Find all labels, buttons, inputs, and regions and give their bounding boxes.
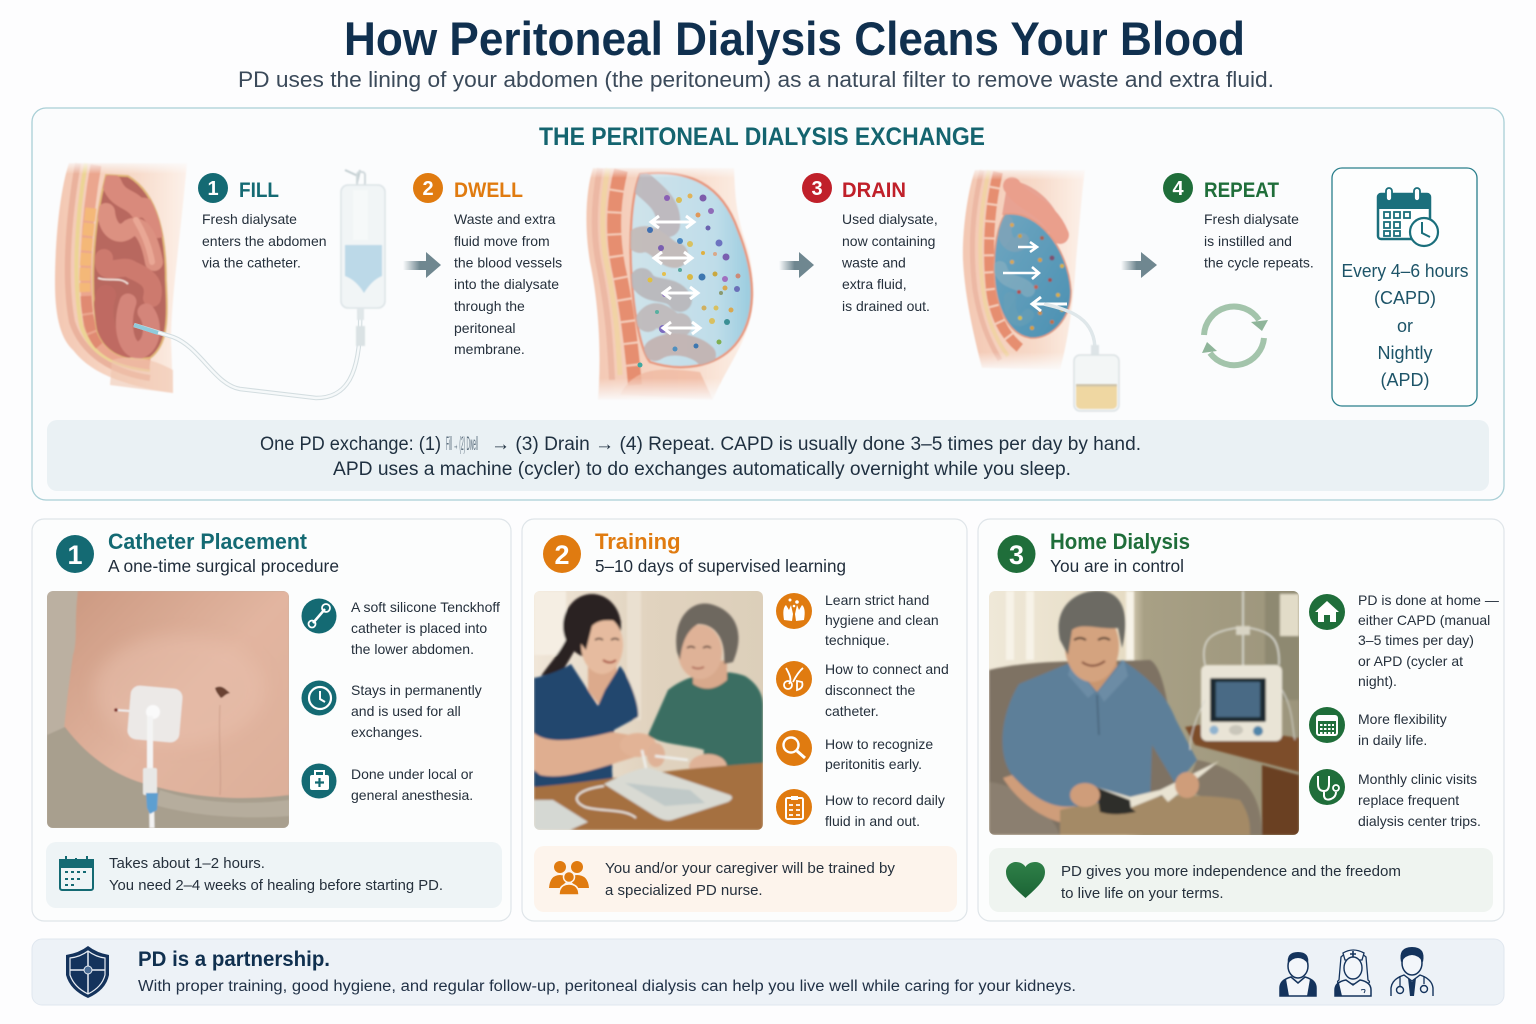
armchair (989, 660, 1180, 835)
bullet: soft silicone catheter: catheter is placed into (351, 620, 487, 636)
bullet: hand hygiene (776, 592, 939, 648)
bullet: recognize peritonitis: peritonitis early. (825, 756, 922, 772)
book (1096, 761, 1219, 808)
step 1: fill: via the catheter. (202, 254, 301, 270)
badge 2: 2 (554, 540, 570, 570)
callout: trained by nurse: a specialized PD nurse. (605, 882, 763, 899)
panel: catheter placement (32, 519, 511, 921)
step 3: drain (802, 173, 938, 314)
catheter tube (134, 310, 360, 398)
step 3: drain: extra fluid, (842, 276, 907, 292)
callout: exchange frequency: Every 4–6 hours (1342, 261, 1468, 281)
bullet: anesthesia: Done under local or (351, 766, 474, 782)
icon: nurse (1335, 950, 1371, 996)
arrow: fill to dwell (403, 252, 441, 278)
step 2: dwell: DWELL (454, 179, 523, 202)
bullet: connect and disconnect: How to connect and (825, 661, 949, 677)
step 4: repeat (1163, 173, 1314, 270)
panel: the peritoneal dialysis exchange (32, 108, 1504, 500)
callout: trained by nurse: You and/or your caregiver will be trained by (605, 860, 896, 877)
photo: abdomen with catheter dressing (47, 591, 289, 828)
callout: duration and healing: Takes about 1–2 hours. (109, 855, 265, 872)
exchange summary band: One PD exchange: (1) (260, 434, 441, 455)
drain tube (1044, 304, 1095, 352)
badge 3: 3 (1009, 540, 1024, 570)
bullet: clinic visits: Monthly clinic visits (1358, 771, 1477, 787)
bullet: hand hygiene: Learn strict hand (825, 592, 929, 608)
step 3: drain: DRAIN (842, 179, 906, 202)
footer banner: partnership: PD is a partnership. (138, 948, 330, 971)
step 4: repeat: REPEAT (1204, 179, 1279, 202)
step 1: fill: Fresh dialysate (202, 211, 297, 227)
step 2: dwell: the blood vessels (454, 254, 562, 270)
icon: patient (1280, 952, 1316, 996)
card heading (595, 529, 846, 576)
badge 1: 1 (67, 540, 83, 570)
step 2: dwell: Waste and extra (454, 211, 556, 227)
icon: heart (1006, 862, 1045, 898)
badge 1 (56, 535, 94, 573)
bullet: recognize peritonitis (776, 730, 933, 772)
exchange summary band (47, 420, 1489, 491)
bullet: connect and disconnect (776, 661, 949, 719)
callout: exchange frequency: or (1397, 316, 1413, 336)
bullet: flexibility: More flexibility (1358, 711, 1447, 727)
step 2: dwell: 2 (422, 178, 434, 200)
bullet: hand hygiene: technique. (825, 632, 890, 648)
step 3: drain: waste and (841, 254, 906, 270)
step 3: drain: 3 (811, 178, 823, 200)
bullet: done at home: PD is done at home — (1358, 592, 1499, 608)
badge 3 (998, 535, 1036, 573)
card heading: Home Dialysis (1050, 529, 1190, 554)
exchange summary band: APD uses a machine (cycler) to do exchanges automatically overnight while you sleep. (333, 459, 1071, 480)
bullet: connect and disconnect: catheter. (825, 703, 879, 719)
card heading: Training (595, 529, 681, 554)
illustration: abdomen during dwell (584, 164, 753, 402)
bullet: done at home: 3–5 times per day) (1358, 632, 1474, 648)
waste particles (638, 194, 740, 368)
callout: exchange frequency: (CAPD) (1374, 288, 1436, 308)
bullet: done at home: either CAPD (manual (1358, 612, 1490, 628)
bullet: clinic visits: dialysis center trips. (1358, 813, 1481, 829)
exchange summary band: → (3) Drain → (4) Repeat. CAPD is usually done 3–5 times per day by hand. (491, 434, 1141, 455)
step 2: dwell: into the dialysate (454, 276, 559, 292)
arrows: flow out (1003, 242, 1067, 311)
callout: independence: to live life on your terms. (1061, 885, 1224, 902)
step 1: fill (198, 173, 327, 270)
bullet: anesthesia: general anesthesia. (351, 787, 473, 803)
step 4: repeat: Fresh dialysate (1204, 211, 1299, 227)
step 4: repeat: the cycle repeats. (1204, 254, 1314, 270)
step 3: drain: now containing (842, 233, 935, 249)
bullet: clinic visits (1309, 769, 1481, 829)
cycler machine and table (1242, 591, 1244, 668)
nurse (563, 594, 621, 658)
bullet: record daily fluid (776, 789, 945, 829)
icon: shield (66, 946, 109, 998)
bullet: soft silicone catheter (302, 598, 500, 657)
step 2: dwell: through the (454, 298, 525, 314)
callout: independence (989, 848, 1493, 912)
step 2: dwell: membrane. (454, 341, 525, 357)
icon: drain bag (1074, 345, 1119, 411)
bullet: flexibility: in daily life. (1358, 732, 1427, 748)
bullet: record daily fluid: fluid in and out. (825, 813, 920, 829)
footer banner: partnership: With proper training, good hygiene, and regular follow-up, peritoneal dialysis can help you live well while caring for your kidneys. (138, 978, 1076, 995)
step 1: fill: FILL (239, 179, 279, 202)
card heading (108, 529, 339, 576)
bullet: stays in permanently (302, 680, 482, 740)
step 2: dwell (413, 173, 562, 357)
panel: home dialysis (978, 519, 1504, 921)
photo: man reading beside cycler (989, 591, 1299, 835)
step 2: dwell: peritoneal (454, 320, 516, 336)
callout: exchange frequency: Nightly (1377, 343, 1433, 363)
arrows: two-way exchange (651, 216, 700, 334)
bullet: stays in permanently: Stays in permanently (351, 682, 482, 698)
icon: dialysate bag (341, 170, 385, 346)
step 2: dwell: fluid move from (454, 233, 550, 249)
step 3: drain: is drained out. (842, 298, 930, 314)
bullet: done at home (1309, 592, 1499, 689)
bullet: stays in permanently: exchanges. (351, 724, 423, 740)
title: How Peritoneal Dialysis Cleans Your Blood (344, 12, 1245, 65)
subtitle: PD uses the lining of your abdomen (the peritoneum) as a natural filter to remove waste and extra fluid. (238, 67, 1274, 92)
man (1088, 662, 1118, 693)
bullet: hand hygiene: hygiene and clean (825, 612, 939, 628)
arrow: drain to repeat (1121, 252, 1157, 278)
step 1: fill: enters the abdomen (202, 233, 327, 249)
panel: training (522, 519, 967, 921)
card heading: 5–10 days of supervised learning (595, 556, 846, 576)
footer banner: partnership (32, 939, 1504, 1005)
illustration: abdomen during fill (55, 160, 360, 398)
step 4: repeat: is instilled and (1204, 233, 1292, 249)
step 4: repeat: 4 (1172, 178, 1184, 200)
icon: repeat cycle (1202, 307, 1268, 365)
bullet: recognize peritonitis: How to recognize (825, 736, 933, 752)
bullet: soft silicone catheter: the lower abdomen. (351, 641, 474, 657)
bullet: flexibility (1309, 707, 1447, 748)
step 1: fill: 1 (207, 178, 219, 200)
card heading: Catheter Placement (108, 529, 308, 554)
bullet: done at home: or APD (cycler at (1358, 653, 1463, 669)
bullet: stays in permanently: and is used for all (351, 703, 461, 719)
callout: duration and healing: You need 2–4 weeks of healing before starting PD. (109, 877, 443, 894)
patient (647, 670, 763, 767)
exchange summary band: Fill → (2) Dwell (446, 434, 478, 455)
bullet: soft silicone catheter: A soft silicone Tenckhoff (351, 599, 500, 615)
arrow: dwell to drain (779, 252, 814, 278)
icon: calendar with clock (1378, 188, 1438, 246)
photo: nurse training patient (534, 591, 763, 830)
bullet: anesthesia (302, 764, 474, 803)
callout: independence: PD gives you more independence and the freedom (1061, 863, 1401, 880)
callout: trained by nurse (534, 846, 957, 912)
callout: duration and healing (46, 842, 502, 908)
panel heading: THE PERITONEAL DIALYSIS EXCHANGE (539, 123, 985, 151)
step 3: drain: Used dialysate, (842, 211, 938, 227)
bullet: done at home: night). (1358, 673, 1397, 689)
table and supplies (534, 763, 763, 830)
badge 2 (543, 535, 581, 573)
callout: exchange frequency: (APD) (1380, 370, 1430, 390)
bullet: clinic visits: replace frequent (1358, 792, 1459, 808)
icon: people (549, 861, 589, 895)
bullet: connect and disconnect: disconnect the (825, 682, 915, 698)
card heading: You are in control (1050, 556, 1184, 576)
illustration: abdomen during drain (962, 166, 1119, 411)
icon: doctor (1391, 947, 1433, 996)
card heading (1050, 529, 1190, 576)
callout: exchange frequency (1332, 168, 1477, 406)
bullet: record daily fluid: How to record daily (825, 792, 945, 808)
icon: calendar (60, 856, 93, 890)
card heading: A one-time surgical procedure (108, 556, 339, 576)
